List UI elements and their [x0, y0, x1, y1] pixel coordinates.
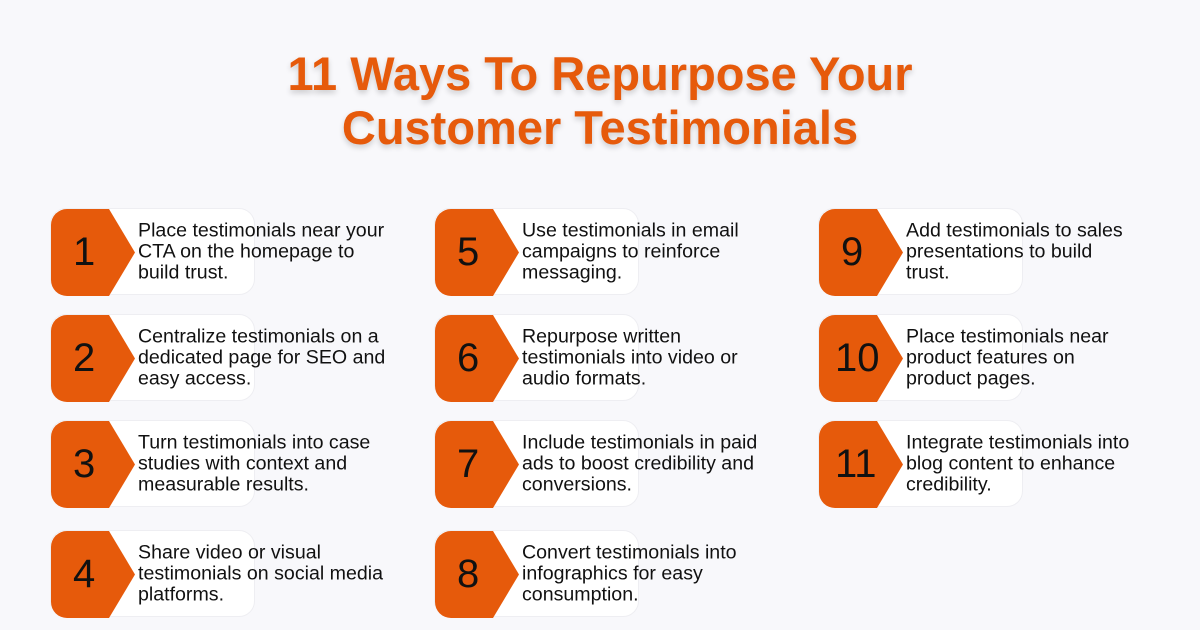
- card 2: easy access.: [138, 367, 251, 389]
- text: Include testimonials in paid: [522, 431, 757, 453]
- card 8: [434, 530, 639, 617]
- card 5: messaging.: [522, 261, 622, 283]
- card 10: product features on: [906, 346, 1075, 368]
- card 3: 3: [73, 442, 95, 486]
- card 7: ads to boost credibility and: [522, 452, 754, 474]
- card 3: Turn testimonials into case: [138, 431, 370, 453]
- card 8: Convert testimonials into: [522, 541, 737, 563]
- card 1: build trust.: [138, 261, 228, 283]
- card 8: 8: [457, 552, 479, 596]
- card 4: [50, 530, 255, 617]
- card 5: [434, 208, 639, 295]
- card 6: testimonials into video or: [522, 346, 738, 368]
- card 2: [50, 314, 255, 401]
- card 9: Add testimonials to sales: [906, 219, 1123, 241]
- card 11: [818, 420, 1023, 507]
- card 3: measurable results.: [138, 473, 309, 495]
- card 8: consumption.: [522, 583, 639, 605]
- title: 11 Ways To Repurpose Your: [287, 47, 913, 100]
- card 4: Share video or visual: [138, 541, 321, 563]
- title: [287, 47, 914, 154]
- text: dedicated page for SEO and: [138, 346, 385, 368]
- card 10: 10: [835, 336, 880, 380]
- card 9: presentations to build: [906, 240, 1092, 262]
- card 5: campaigns to reinforce: [522, 240, 720, 262]
- card 6: [434, 314, 639, 401]
- card 9: 9: [841, 230, 863, 274]
- card 1: [50, 208, 255, 295]
- card 10: Place testimonials near: [906, 325, 1109, 347]
- card 11: blog content to enhance: [906, 452, 1115, 474]
- card 7: [434, 420, 639, 507]
- card 5: Use testimonials in email: [522, 219, 739, 241]
- card 8: infographics for easy: [522, 562, 703, 584]
- text: testimonials on social media: [138, 562, 383, 584]
- text: Place testimonials near your: [138, 219, 384, 241]
- card 7: conversions.: [522, 473, 632, 495]
- card 10: [818, 314, 1023, 401]
- card 9: [818, 208, 1023, 295]
- card 11: 11: [835, 442, 877, 486]
- card 6: Repurpose written: [522, 325, 681, 347]
- card 11: Integrate testimonials into: [906, 431, 1129, 453]
- card 3: studies with context and: [138, 452, 347, 474]
- card 2: 2: [73, 336, 95, 380]
- card 4: platforms.: [138, 583, 224, 605]
- card 4: 4: [73, 552, 95, 596]
- card 10: product pages.: [906, 367, 1036, 389]
- card 3: [50, 420, 255, 507]
- card 7: 7: [457, 442, 479, 486]
- card 1: CTA on the homepage to: [138, 240, 354, 262]
- card 6: audio formats.: [522, 367, 646, 389]
- card 11: credibility.: [906, 473, 992, 495]
- card 5: 5: [457, 230, 479, 274]
- card 9: trust.: [906, 261, 950, 283]
- card 6: 6: [457, 336, 479, 380]
- card 1: 1: [73, 230, 95, 274]
- text: Centralize testimonials on a: [138, 325, 379, 347]
- title: Customer Testimonials: [342, 101, 858, 154]
